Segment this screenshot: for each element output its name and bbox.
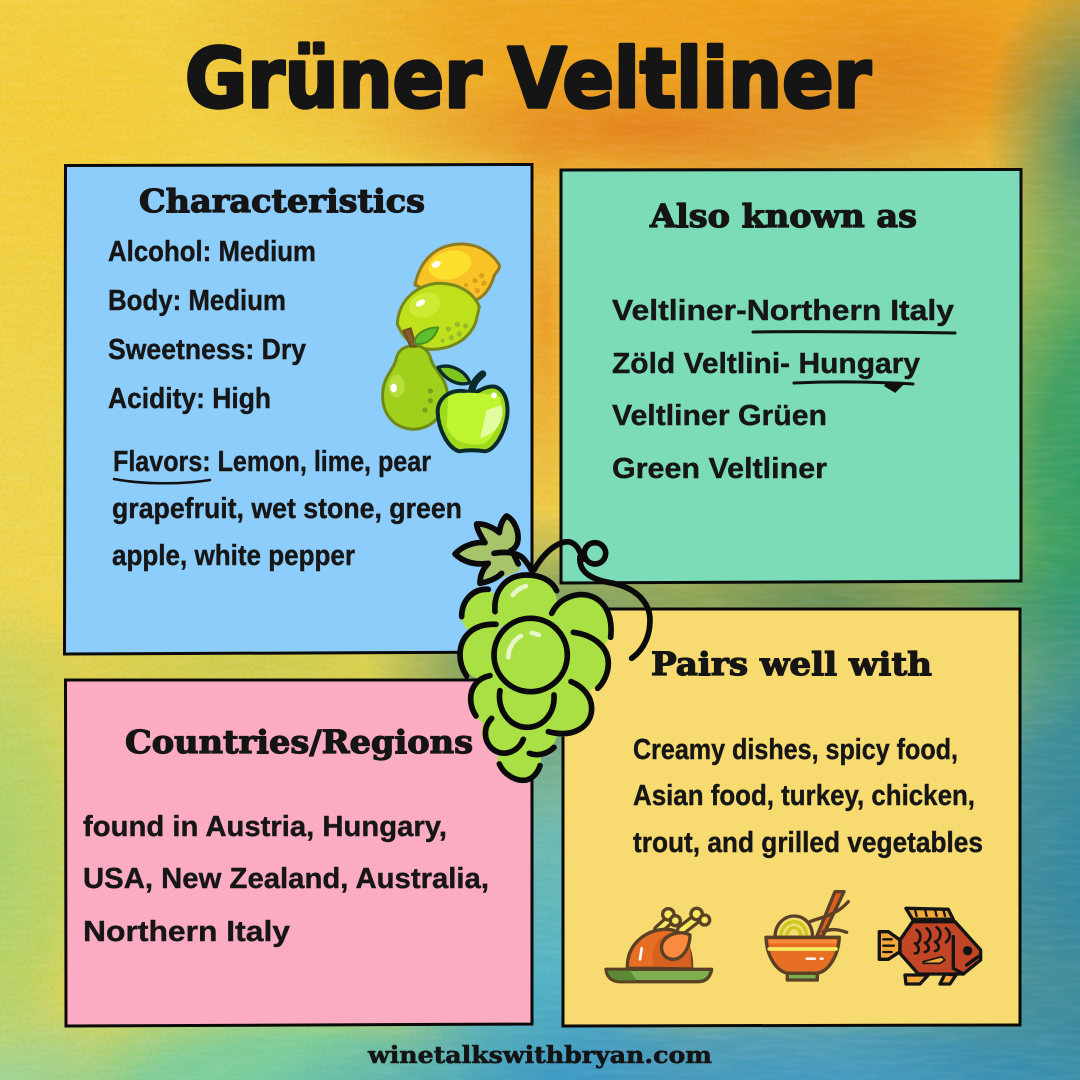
- tendril: [534, 542, 650, 658]
- pairings text: [633, 734, 983, 859]
- icon: fruits: [383, 244, 507, 451]
- wine attributes: Alcohol: Medium: [108, 236, 316, 268]
- icon: roast turkey: [606, 908, 712, 982]
- panel: pairs well with: [563, 609, 1020, 1026]
- synonyms list: Green Veltliner: [612, 453, 827, 485]
- heading: countries/regions: Countries/Regions: [125, 723, 473, 761]
- flavors text: apple, white pepper: [112, 540, 355, 572]
- icon: noodle bowl: [766, 892, 848, 980]
- synonyms list: Veltliner Grüen: [612, 400, 827, 432]
- berry outlines: [460, 575, 611, 780]
- heading: also known as: Also known as: [649, 197, 917, 235]
- wine attributes: Acidity: High: [108, 383, 271, 415]
- regions text: USA, New Zealand, Australia,: [83, 863, 489, 895]
- flavors text: grapefruit, wet stone, green: [112, 493, 462, 525]
- icon: fish: [879, 908, 981, 984]
- grape leaf: [455, 516, 520, 583]
- regions text: Northern Italy: [83, 916, 290, 948]
- wine attributes: Sweetness: Dry: [108, 334, 306, 366]
- title: Grüner Veltliner: [185, 32, 872, 127]
- berries fill: [459, 574, 612, 781]
- panel: characteristics: [64, 164, 532, 654]
- icon: green grape bunch: [455, 516, 650, 781]
- flavors text: [112, 446, 462, 572]
- flavors text: Flavors: Lemon, lime, pear: [113, 446, 431, 478]
- synonyms list: Zöld Veltlini- Hungary: [612, 348, 920, 380]
- pairings text: Creamy dishes, spicy food,: [633, 734, 958, 766]
- regions text: found in Austria, Hungary,: [83, 811, 447, 843]
- highlights: [508, 586, 539, 657]
- wine attributes: Body: Medium: [108, 285, 286, 317]
- synonyms list: [612, 295, 955, 485]
- panel: countries and regions: [66, 680, 532, 1026]
- pairings text: trout, and grilled vegetables: [633, 827, 983, 859]
- regions text: [83, 811, 489, 948]
- heading: characteristics: Characteristics: [139, 182, 425, 220]
- wine attributes: [108, 236, 316, 415]
- pairings text: Asian food, turkey, chicken,: [633, 780, 975, 812]
- website url: winetalkswithbryan.com: [367, 1042, 712, 1069]
- synonyms list: Veltliner-Northern Italy: [612, 295, 954, 327]
- heading: pairs well with: Pairs well with: [651, 645, 932, 683]
- panel: also known as: [561, 170, 1021, 583]
